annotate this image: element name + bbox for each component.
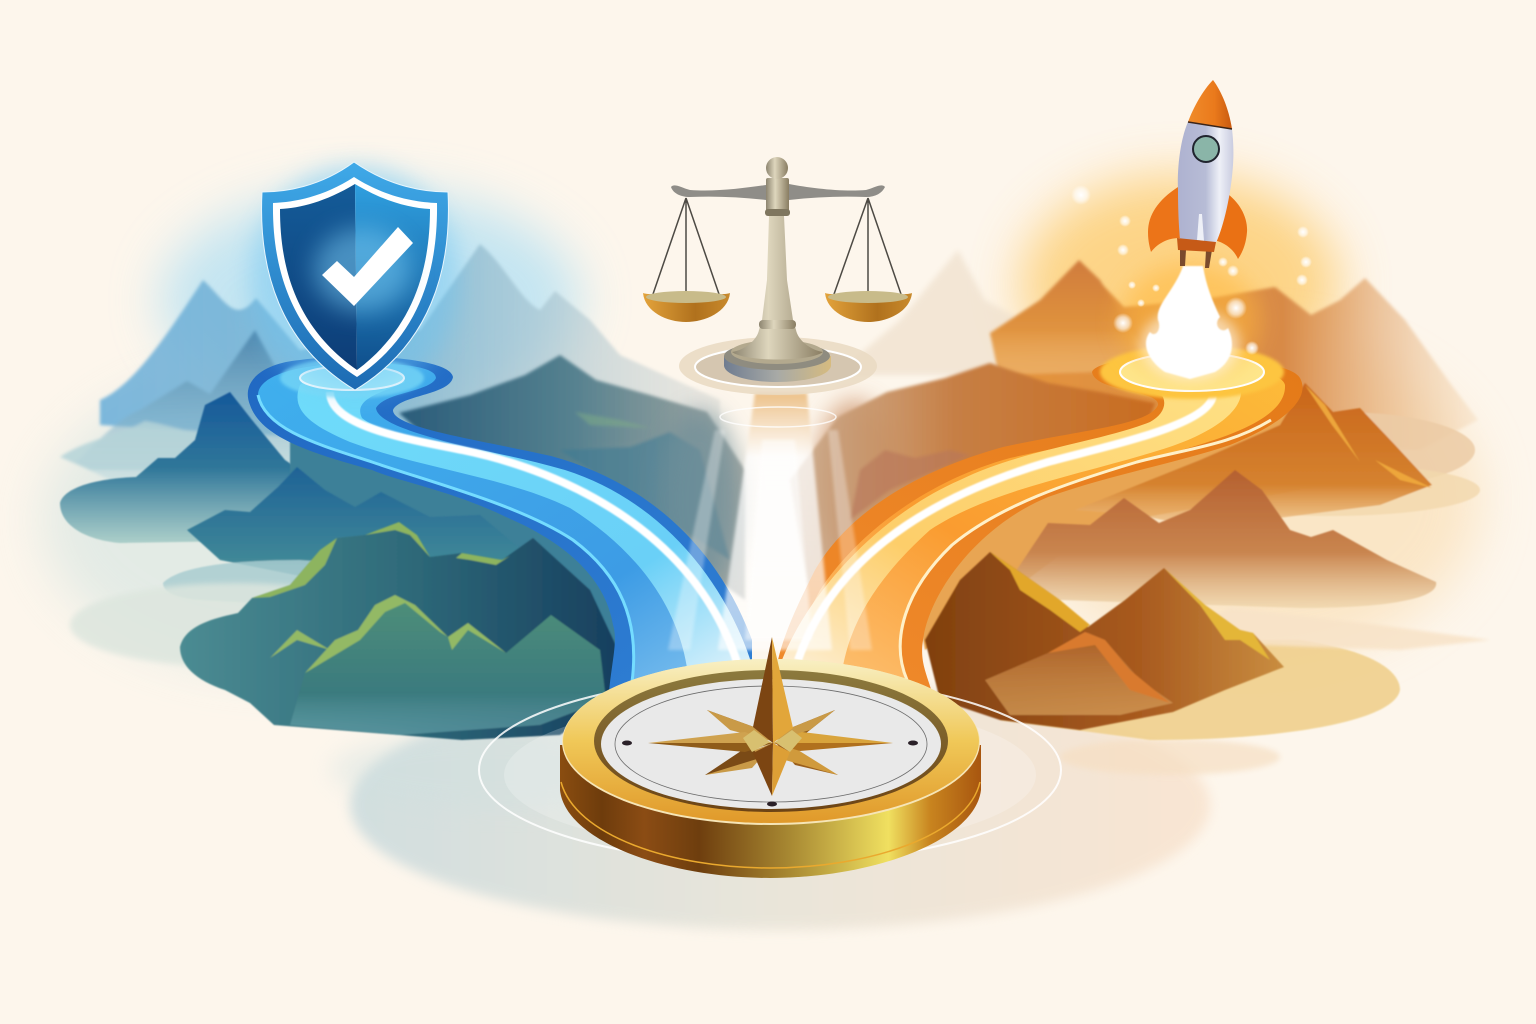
center dusk wash bbox=[660, 400, 895, 590]
compass face bbox=[601, 679, 941, 809]
rocket window bbox=[1193, 136, 1219, 162]
right mountains: middle peak bbox=[1010, 470, 1436, 608]
left mountains: dark blue peak bbox=[60, 392, 360, 543]
right mountains: under-path peak bbox=[915, 383, 1480, 650]
left mountains: fill below path bbox=[290, 430, 630, 660]
icon: balance scale bbox=[643, 157, 912, 395]
rocket legs bbox=[1180, 250, 1212, 268]
rocket fins bbox=[1148, 187, 1180, 252]
compass rim side bbox=[560, 745, 981, 878]
right mountains: pale far range bbox=[835, 250, 1040, 375]
orange path bbox=[778, 345, 1303, 692]
ground shadow bbox=[330, 680, 1280, 930]
sparks bbox=[1071, 185, 1312, 355]
right pan bbox=[825, 198, 912, 322]
compass rim top bbox=[562, 659, 980, 825]
icon: rocket with flame bbox=[1071, 80, 1312, 381]
compass bezel bbox=[594, 670, 948, 812]
check mark bbox=[322, 227, 413, 306]
scale finial bbox=[766, 157, 788, 179]
icon: shield with check bbox=[250, 162, 460, 395]
right mountain mist band bbox=[1200, 607, 1490, 650]
flame bbox=[1146, 266, 1232, 379]
left mountains: pale mist disc bbox=[70, 583, 400, 667]
spotlight beam from scales bbox=[668, 393, 872, 650]
scale beam bbox=[671, 185, 766, 200]
right mountains: gold base disc bbox=[1000, 640, 1400, 740]
left mountains: teal middle peak bbox=[163, 467, 540, 610]
blue path bbox=[248, 357, 752, 692]
scale post bbox=[732, 216, 823, 360]
right mountains: gold foreground bbox=[925, 552, 1284, 730]
left mountains: far range bbox=[60, 244, 720, 480]
right mountains: back range left of path bbox=[790, 363, 1155, 600]
left mountains: back range right of path bbox=[399, 355, 745, 600]
scale column top bbox=[766, 178, 789, 212]
rocket body bbox=[1178, 122, 1233, 243]
scale base bbox=[724, 356, 831, 382]
compass bbox=[479, 637, 1061, 878]
right mountains: far range bbox=[990, 260, 1478, 450]
rocket nozzle bbox=[1177, 238, 1216, 252]
compass star bbox=[648, 637, 893, 796]
left mountains: green foreground bbox=[180, 522, 618, 740]
color washes bbox=[40, 175, 1480, 670]
rocket nose bbox=[1188, 80, 1232, 129]
green ridge highlights bbox=[252, 538, 337, 598]
left pan bbox=[643, 198, 730, 322]
